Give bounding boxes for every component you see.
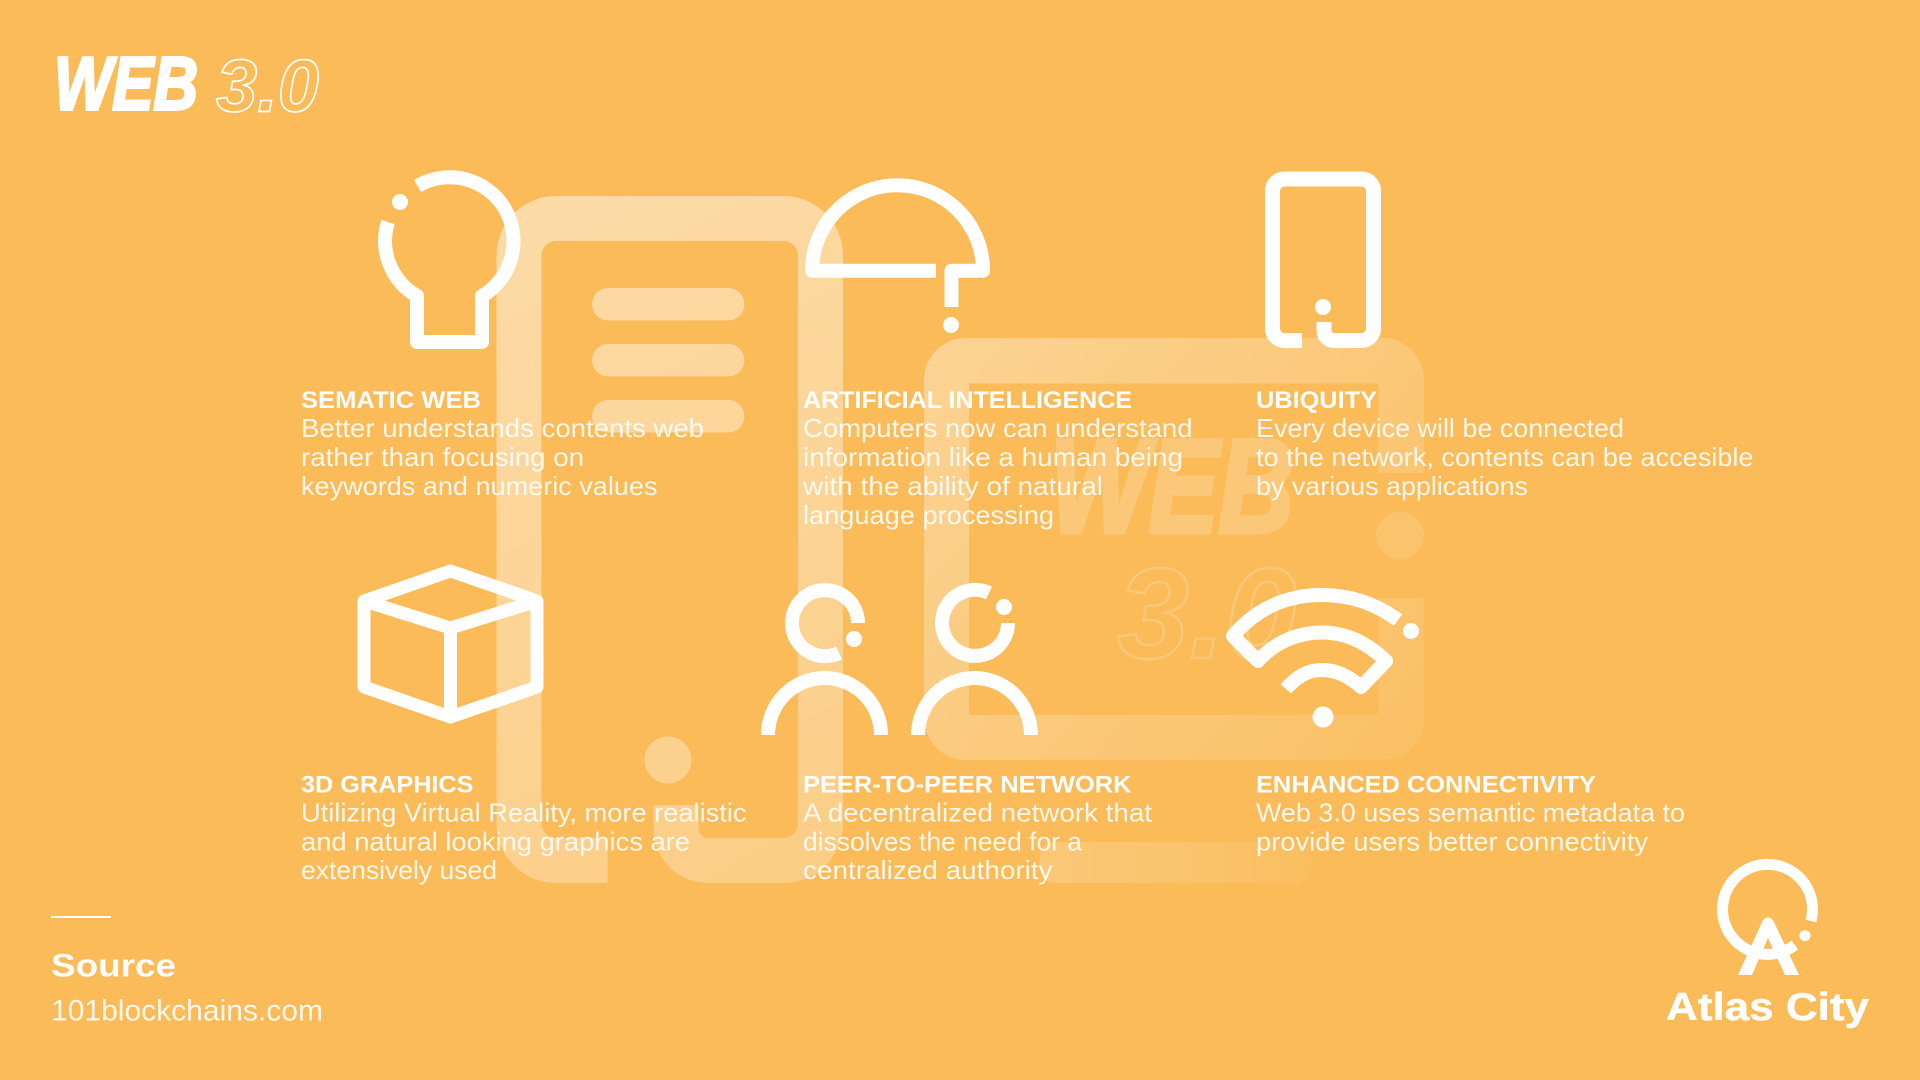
text block: 3d graphics: and natural looking graphics are [301,826,690,856]
text block: enhanced connectivity: ENHANCED CONNECTIVITY [1256,772,1596,798]
text block: artificial intelligence: with the ability of natural [802,471,1103,501]
text block: 3d graphics: Utilizing Virtual Reality, more realistic [301,798,746,828]
text block: artificial intelligence [802,387,1192,530]
icon: phone [1272,179,1374,341]
background phone illustration [519,218,821,861]
background tablet illustration: WEB [1050,413,1294,561]
text block: peer-to-peer network: dissolves the need for a [803,826,1083,856]
text block: sematic web: keywords and numeric values [301,471,658,501]
text block: artificial intelligence: ARTIFICIAL INTELLIGENCE [803,387,1132,414]
text block: enhanced connectivity [1256,772,1685,856]
text block: ubiquity: Every device will be connected [1256,413,1624,443]
text block: peer-to-peer network [803,772,1153,885]
text block: peer-to-peer network: A decentralized network that [803,798,1153,828]
text block: ubiquity: UBIQUITY [1256,387,1377,414]
logo: Atlas City [1666,864,1869,1029]
icon: cube [364,571,537,717]
text block: 3d graphics [301,772,746,885]
text block: sematic web: SEMATIC WEB [301,387,481,414]
icon: wifi [1233,595,1419,728]
text block: ubiquity: by various applications [1256,471,1528,501]
title: WEB [54,42,198,126]
source note [51,916,323,1028]
text block: peer-to-peer network: centralized authority [803,855,1052,885]
icon: light bulb [385,177,514,342]
title: 3.0 [216,44,319,128]
text block: sematic web [301,387,704,501]
text block: enhanced connectivity: Web 3.0 uses semantic metadata to [1256,798,1685,828]
text block: sematic web: rather than focusing on [301,442,584,472]
text block: artificial intelligence: information like a human being [803,442,1183,472]
text block: artificial intelligence: Computers now can understand [803,413,1192,443]
title [54,42,319,128]
icon: brain dome [812,185,983,333]
background tablet illustration [924,338,1424,883]
source note: 101blockchains.com [51,994,323,1028]
icon: two people [768,590,1031,735]
text block: 3d graphics: extensively used [301,855,497,885]
source note: Source [51,948,176,984]
text block: enhanced connectivity: provide users better connectivity [1256,826,1648,856]
text block: 3d graphics: 3D GRAPHICS [301,772,474,798]
text block: ubiquity: to the network, contents can be accesible [1256,442,1754,472]
background tablet illustration: 3.0 [1117,542,1297,686]
text block: peer-to-peer network: PEER-TO-PEER NETWORK [803,772,1132,798]
text block: artificial intelligence: language processing [803,500,1054,530]
text block: sematic web: Better understands contents web [301,413,704,443]
logo: Atlas City: Atlas City [1666,986,1869,1029]
text block: ubiquity [1256,387,1754,501]
